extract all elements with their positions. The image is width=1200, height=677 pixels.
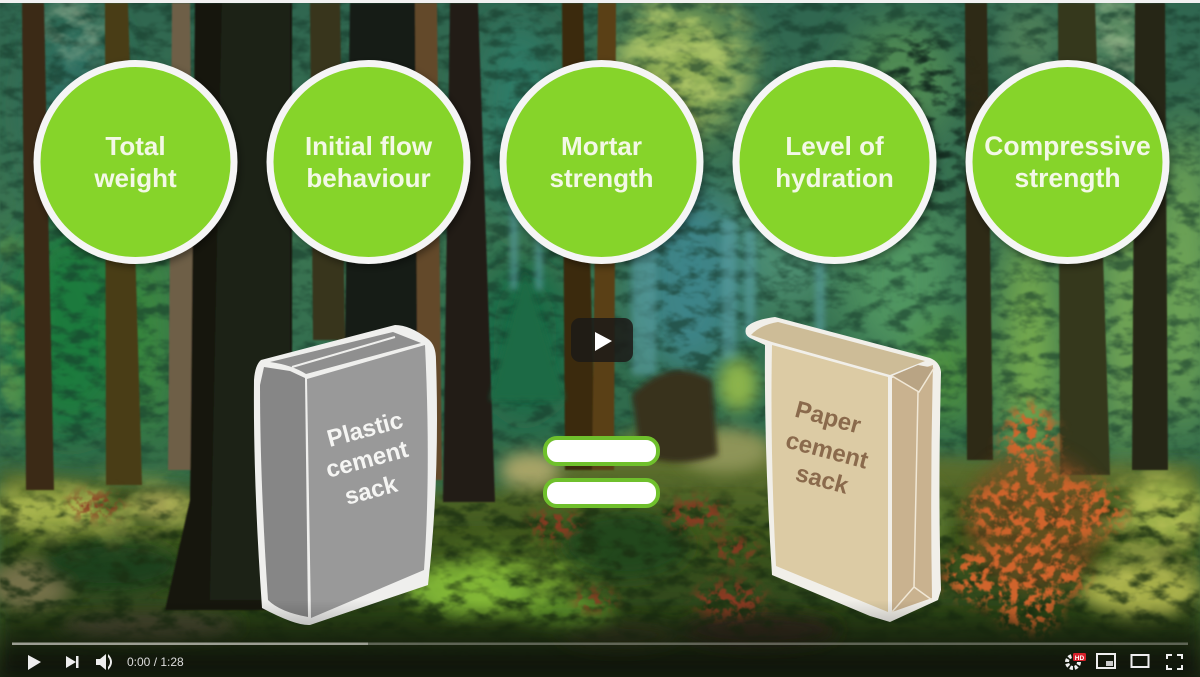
icon: theater xyxy=(1132,655,1148,667)
paper sack label: cement xyxy=(783,427,871,475)
paper cement sack xyxy=(746,317,941,622)
circle: Level of hydration: Level of xyxy=(785,131,884,161)
canopy foliage xyxy=(0,0,1200,460)
circle: Initial flow behaviour xyxy=(270,64,467,260)
circle: Mortar strength: strength xyxy=(550,163,654,193)
icon: settings with HD badge: HD xyxy=(1075,655,1084,662)
plastic sack label: Plastic xyxy=(324,407,406,453)
video controls bar xyxy=(0,600,1200,677)
time: 0:00 / 1:28 xyxy=(127,655,184,669)
plastic sack label: sack xyxy=(342,471,401,511)
uprooted stump xyxy=(632,370,718,462)
circle: Total weight: weight xyxy=(93,163,177,193)
progress bar xyxy=(12,642,368,645)
circle: Level of hydration xyxy=(736,64,933,260)
circle: Level of hydration: hydration xyxy=(775,163,894,193)
icon: play xyxy=(28,655,41,670)
circle: Initial flow behaviour: behaviour xyxy=(306,163,431,193)
icon: volume xyxy=(96,654,112,670)
circle: Mortar strength: Mortar xyxy=(561,131,642,161)
progress bar remainder xyxy=(368,642,1188,645)
distant pale trunks xyxy=(510,180,825,375)
red autumn bush glow xyxy=(965,450,1105,590)
icon: next xyxy=(66,656,78,668)
circle: Total weight: Total xyxy=(105,131,166,161)
paper sack label: sack xyxy=(793,460,852,500)
equals sign xyxy=(545,438,658,506)
video play button xyxy=(571,318,633,362)
circle: Compressive strength: strength xyxy=(1014,163,1120,193)
icon: settings with HD badge xyxy=(1067,653,1086,668)
icon: fullscreen xyxy=(1167,655,1182,669)
circle: Initial flow behaviour: Initial flow xyxy=(305,131,433,161)
paper sack label: Paper xyxy=(792,396,864,439)
red autumn bush xyxy=(943,405,1125,630)
ground xyxy=(0,430,1200,677)
paper sack label xyxy=(783,396,871,500)
circle: Compressive strength: Compressive xyxy=(984,131,1151,161)
circle: Compressive strength xyxy=(969,64,1166,260)
circle: Mortar strength xyxy=(503,64,700,260)
plastic sack label xyxy=(323,407,411,511)
branch shadows on upper right xyxy=(875,30,965,210)
circle: Total weight xyxy=(37,64,234,260)
young spruce xyxy=(490,270,565,400)
icon: miniplayer xyxy=(1097,654,1115,668)
plastic cement sack xyxy=(254,325,437,625)
ground red leaves xyxy=(67,493,766,618)
plastic sack label: cement xyxy=(323,436,411,484)
